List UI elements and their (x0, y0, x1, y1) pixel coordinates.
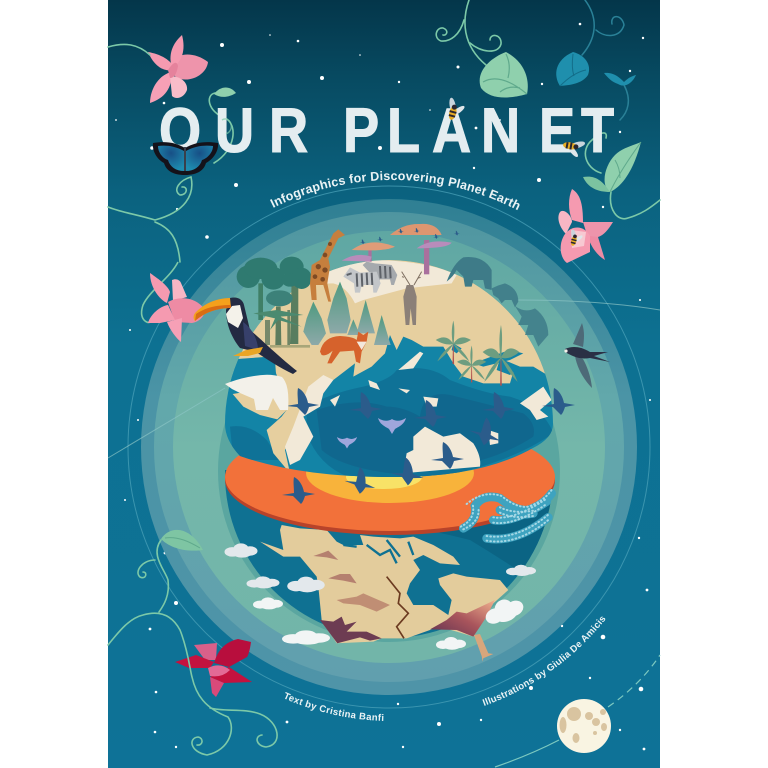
mountains (313, 551, 390, 612)
palm trees (436, 321, 519, 386)
leaf: lower left (161, 530, 203, 551)
conifer trees (303, 282, 391, 345)
leaf: small green near title (214, 87, 236, 97)
lower hemisphere ocean (225, 470, 550, 636)
leaf: small teal (604, 73, 636, 86)
forest (237, 257, 312, 348)
mantle and core slice (225, 423, 555, 535)
leaves: right pair (583, 142, 641, 192)
vine around left flower (142, 262, 178, 322)
fox (320, 332, 368, 363)
moon (557, 699, 611, 753)
bee near T (561, 137, 587, 160)
illustrator credit: Illustrations by Giulia De Amicis (482, 616, 606, 706)
land under polar bear (233, 390, 287, 419)
acacia trees (342, 224, 460, 274)
orbit lines (108, 300, 660, 458)
cream ice cap (327, 260, 456, 304)
vine over title (222, 119, 231, 134)
wave (461, 490, 552, 542)
flower: pink left (148, 273, 205, 342)
upper hemisphere (225, 260, 553, 477)
zebras (343, 262, 397, 293)
elephants (447, 257, 548, 347)
land: North America (260, 525, 508, 662)
lava patches (320, 617, 382, 643)
subtitle: Infographics for Discovering Planet Earth (270, 171, 520, 210)
leaf: teal (556, 52, 589, 86)
land: Eurasia beige (238, 260, 545, 469)
southern land (403, 427, 480, 473)
flower: pink top left (148, 35, 208, 103)
arctic channels (343, 540, 413, 563)
flying birds (282, 388, 575, 504)
deer (402, 272, 422, 325)
swallow (564, 323, 610, 388)
cover background (108, 0, 660, 768)
vines (108, 0, 660, 755)
stars (115, 23, 651, 750)
ocean shading (440, 504, 550, 568)
deep ocean (307, 368, 553, 483)
cream strip (285, 375, 333, 465)
teal vine (582, 0, 628, 120)
lava drip (474, 634, 493, 662)
whale tails (337, 418, 406, 448)
flower: pink right with bee (558, 189, 613, 263)
title: OUR PLANET (0, 96, 614, 166)
giraffe (310, 229, 345, 302)
ocean patch left (228, 358, 277, 390)
moon orbit (495, 655, 660, 767)
bee on title (443, 96, 468, 123)
lagoons (452, 343, 523, 375)
polar bear (225, 375, 288, 410)
butterfly (153, 142, 218, 175)
clouds (224, 543, 536, 650)
crack (387, 577, 408, 638)
flower: crimson (175, 639, 252, 697)
leaf: large green (480, 52, 528, 98)
coastal islands (330, 352, 552, 473)
toucan (194, 297, 297, 374)
concentric atmosphere rings (128, 186, 650, 708)
author credit: Text by Cristina Banfi (285, 692, 384, 721)
